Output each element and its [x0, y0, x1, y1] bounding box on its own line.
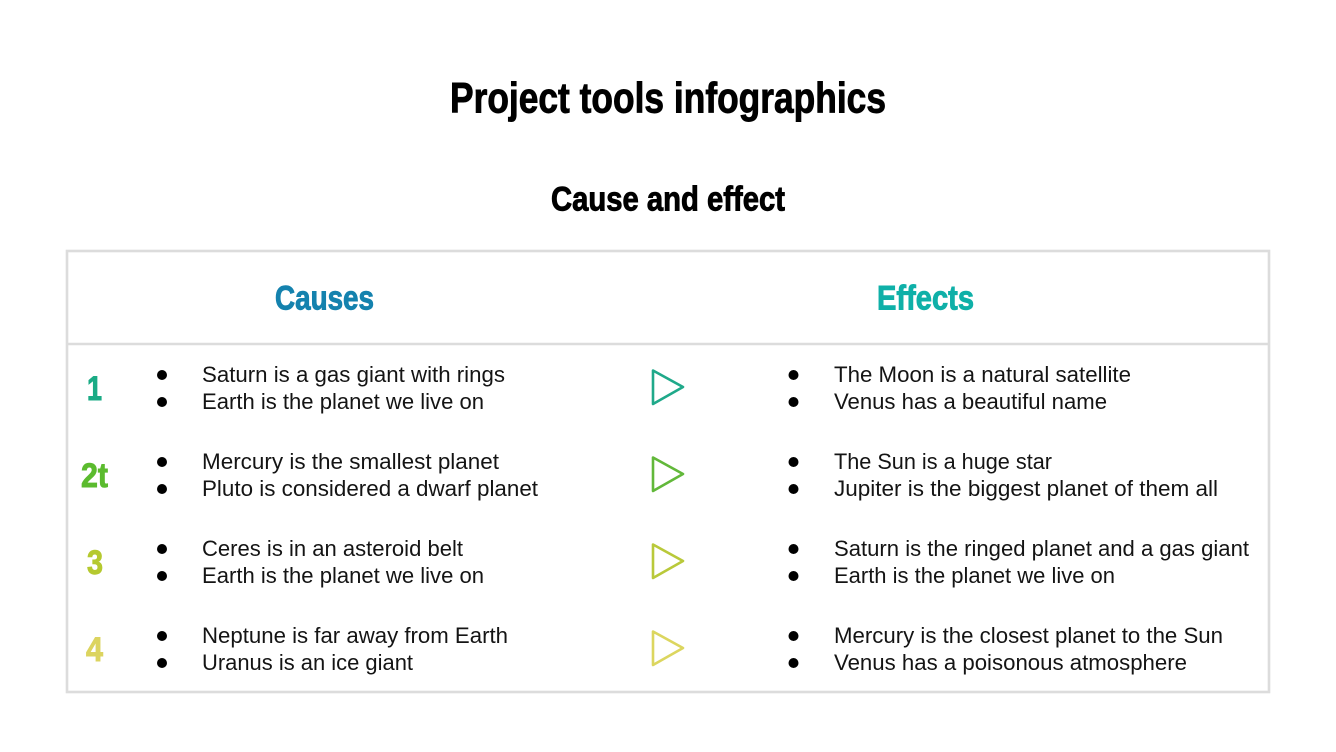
subtitle: Cause and effect: [551, 180, 785, 218]
row 2 effects list: Jupiter is the biggest planet of them all: [834, 476, 1218, 501]
row 4 effects list: Mercury is the closest planet to the Sun: [834, 623, 1223, 648]
row 1: [87, 362, 1131, 414]
number 1: 1: [87, 370, 102, 408]
row 1 effects list: [788, 362, 1131, 414]
row 1 effects list: The Moon is a natural satellite: [834, 362, 1131, 387]
row 3 effects list: Earth is the planet we live on: [834, 563, 1115, 588]
row 2 effects list: The Sun is a huge star: [834, 449, 1052, 474]
panel: table frame: [67, 251, 1269, 692]
number 3: 3: [87, 544, 103, 582]
row 2 causes list: Mercury is the smallest planet: [202, 449, 499, 474]
row 3: [87, 536, 1249, 588]
heading: effects: Effects: [877, 280, 974, 318]
row 4: [86, 623, 1223, 675]
row 3 causes list: Earth is the planet we live on: [202, 563, 484, 588]
row 3 effects list: [788, 536, 1249, 588]
row 4 effects list: [788, 623, 1223, 675]
row 4 causes list: Neptune is far away from Earth: [202, 623, 508, 648]
row 4 effects list: Venus has a poisonous atmosphere: [834, 650, 1187, 675]
row 3 effects list: Saturn is the ringed planet and a gas giant: [834, 536, 1249, 561]
row 3 causes list: Ceres is in an asteroid belt: [202, 536, 463, 561]
row 1 causes list: [157, 362, 505, 414]
row 2 effects list: [788, 449, 1218, 501]
arrow 3: [653, 544, 683, 578]
arrow 1: [653, 370, 683, 404]
row 4 causes list: Uranus is an ice giant: [202, 650, 413, 675]
arrow 4: [653, 632, 683, 665]
row 4 causes list: [157, 623, 508, 675]
row 1 effects list: Venus has a beautiful name: [834, 389, 1107, 414]
row 1 causes list: Earth is the planet we live on: [202, 389, 484, 414]
title: Project tools infographics: [450, 74, 886, 122]
number 2t: 2t: [81, 457, 108, 495]
row 2 causes list: Pluto is considered a dwarf planet: [202, 476, 538, 501]
arrow 2: [653, 458, 683, 491]
heading: causes: Causes: [275, 280, 374, 318]
row 3 causes list: [157, 536, 484, 588]
number 4: 4: [86, 631, 103, 669]
row 2: [81, 449, 1218, 501]
row 1 causes list: Saturn is a gas giant with rings: [202, 362, 505, 387]
row 2 causes list: [157, 449, 538, 501]
